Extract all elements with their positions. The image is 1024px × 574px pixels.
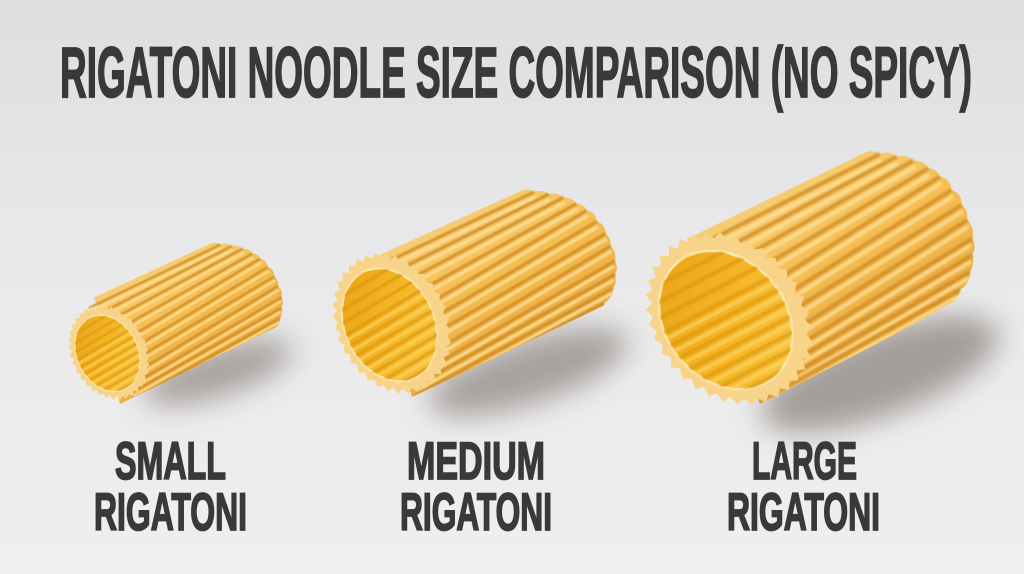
label: medium rigatoni	[400, 432, 552, 542]
shadow: small	[136, 325, 300, 419]
label: small rigatoni: RIGATONI	[94, 483, 247, 542]
shadow: medium	[419, 309, 637, 435]
icon: small rigatoni noodle	[68, 242, 283, 404]
small rigatoni group	[68, 242, 304, 421]
label: large rigatoni	[727, 432, 880, 542]
large rigatoni group	[646, 151, 1012, 448]
shadow: large	[748, 292, 1012, 456]
label: large rigatoni: LARGE	[752, 432, 857, 491]
label: small rigatoni: SMALL	[115, 432, 226, 491]
label: small rigatoni	[94, 432, 247, 542]
label: medium rigatoni: RIGATONI	[400, 483, 552, 542]
label: medium rigatoni: MEDIUM	[407, 432, 545, 491]
icon: medium rigatoni noodle	[332, 190, 617, 397]
icon: large rigatoni noodle	[646, 151, 974, 404]
medium rigatoni group	[332, 190, 640, 432]
label: large rigatoni: RIGATONI	[727, 483, 880, 542]
